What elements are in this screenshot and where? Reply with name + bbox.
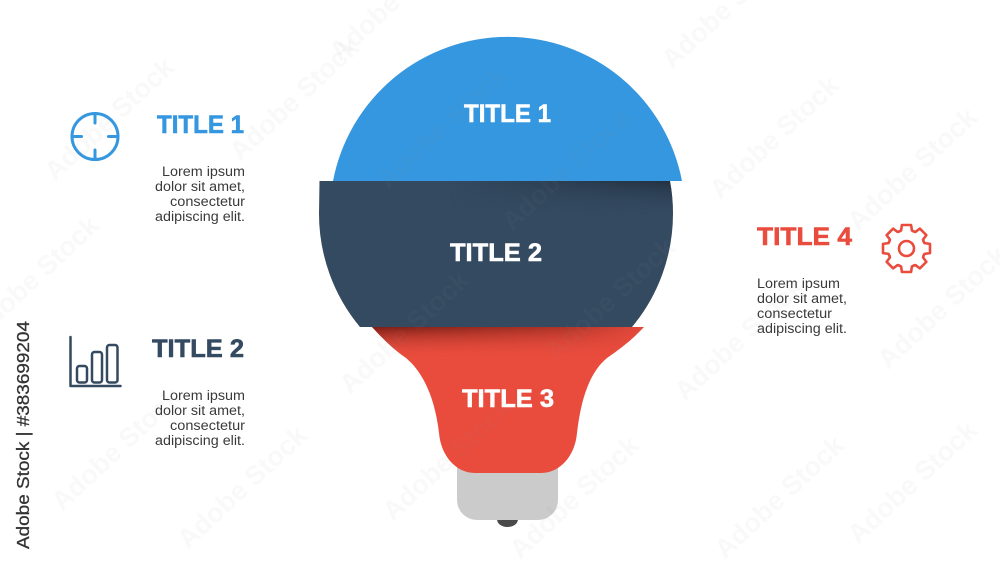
text block: right description 4: consectetur xyxy=(757,306,833,321)
heading: bulb title 1: TITLE 1 xyxy=(464,100,551,128)
watermark: repeated stock marks: Adobe Stock xyxy=(224,31,365,166)
text block: right description 4: dolor sit amet, xyxy=(757,291,847,306)
heading: bulb title 3: TITLE 3 xyxy=(462,385,554,413)
watermark: repeated stock marks: Adobe Stock xyxy=(842,101,983,236)
text block: left description 1: dolor sit amet, xyxy=(155,179,245,194)
text block: left description 2: adipiscing elit. xyxy=(155,433,245,448)
heading: left title 1: TITLE 1 xyxy=(157,111,244,139)
icon: bar chart xyxy=(70,337,120,386)
heading: bulb title 2: TITLE 2 xyxy=(450,239,542,267)
text block: left description 2: Lorem ipsum xyxy=(162,388,245,403)
side label: stock image id: Adobe Stock | #383699204 xyxy=(13,321,33,549)
text block: right description 4 xyxy=(757,276,847,336)
watermark: repeated stock marks: Adobe Stock xyxy=(504,429,645,563)
text block: left description 2: consectetur xyxy=(170,418,246,433)
text block: right description 4: adipiscing elit. xyxy=(757,321,847,336)
text block: left description 1: adipiscing elit. xyxy=(155,209,245,224)
watermark: repeated stock marks: Adobe Stock xyxy=(496,101,637,236)
text block: left description 1: consectetur xyxy=(170,194,246,209)
panel: bulb neck section xyxy=(372,327,644,473)
text block: left description 1: Lorem ipsum xyxy=(162,164,245,179)
watermark: repeated stock marks: Adobe Stock xyxy=(704,69,845,204)
watermark: repeated stock marks: Adobe Stock xyxy=(334,264,475,399)
watermark: repeated stock marks: Adobe Stock xyxy=(46,381,187,516)
panel: bulb top section xyxy=(333,37,682,181)
heading: left title 2: TITLE 2 xyxy=(152,335,244,363)
icon: target crosshair xyxy=(72,114,118,160)
watermark: repeated stock marks: Adobe Stock xyxy=(377,391,518,526)
icon: gear xyxy=(883,225,930,272)
watermark: repeated stock marks: Adobe Stock xyxy=(172,419,313,554)
text block: left description 1 xyxy=(155,164,246,224)
panel: bulb middle section xyxy=(319,181,673,327)
text block: left description 2 xyxy=(155,388,246,448)
text block: right description 4: Lorem ipsum xyxy=(757,276,840,291)
watermark: repeated stock marks: Adobe Stock xyxy=(669,271,810,406)
watermark: repeated stock marks: Adobe Stock xyxy=(842,414,983,549)
watermark: repeated stock marks: Adobe Stock xyxy=(709,429,850,563)
icon: bulb screw base xyxy=(457,460,558,527)
heading: right title 4: TITLE 4 xyxy=(757,223,852,251)
watermark: repeated stock marks: Adobe Stock xyxy=(372,59,513,194)
watermark: repeated stock marks: Adobe Stock xyxy=(540,231,681,366)
text block: left description 2: dolor sit amet, xyxy=(155,403,245,418)
watermark: repeated stock marks: Adobe Stock xyxy=(39,51,180,186)
